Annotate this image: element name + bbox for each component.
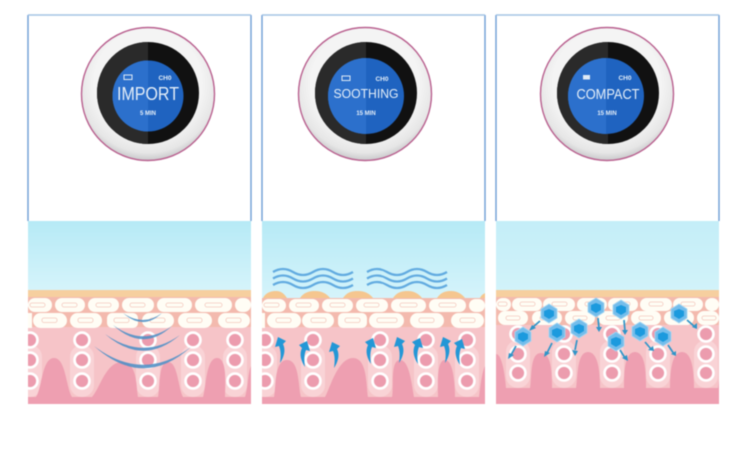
device: import screen: IMPORT — [117, 84, 179, 104]
skin diagram: import — [18, 221, 251, 404]
panel: soothing — [253, 15, 485, 404]
device: compact screen: 15 MIN — [597, 111, 617, 117]
device frame — [28, 15, 251, 221]
device: soothing screen: CH0 — [375, 76, 389, 83]
device: compact screen: CH0 — [618, 75, 632, 82]
skin diagram: soothing — [253, 221, 485, 404]
sound wave arcs — [94, 313, 191, 368]
device: import screen: CH0 — [158, 75, 172, 82]
device frame — [262, 15, 485, 221]
molecules with arrows — [508, 298, 697, 361]
device: soothing screen: 15 MIN — [356, 111, 376, 117]
device: compact screen — [540, 28, 674, 160]
panel: compact — [496, 15, 719, 404]
device: compact screen: COMPACT — [576, 87, 640, 103]
upward flow arrows — [275, 337, 465, 368]
soothing waves — [273, 269, 447, 288]
device frame — [496, 15, 719, 221]
device: soothing screen: SOOTHING — [334, 87, 398, 101]
skin diagram: compact — [496, 221, 719, 404]
device: import screen — [82, 28, 214, 160]
device: import screen: 5 MIN — [140, 111, 156, 117]
device: soothing screen — [298, 28, 432, 160]
panel: import — [18, 15, 251, 404]
